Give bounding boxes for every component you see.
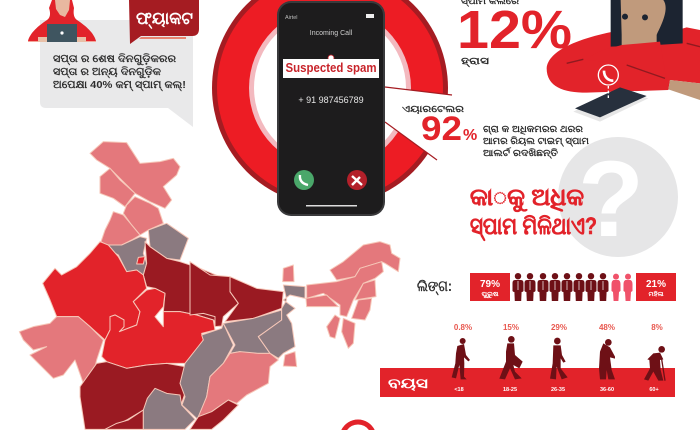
female share box: ମହିଳା — [648, 291, 665, 298]
age percentages: 0.8% — [454, 323, 472, 332]
age percentages: 15% — [503, 323, 519, 332]
age range labels: 60+ — [649, 387, 659, 393]
gender breakdown: ଲିଙ୍ଗ: — [417, 278, 452, 296]
stat: 12 percent reduction: 12% — [457, 0, 572, 60]
illustration: hooded person with laptop — [28, 0, 96, 42]
map: eastern and north-eastern states — [180, 242, 400, 429]
female share box — [636, 273, 676, 301]
smartphone — [277, 1, 385, 216]
heading: who gets more spam — [470, 184, 597, 242]
age range labels: 18-25 — [503, 387, 517, 393]
heading: who gets more spam: ସ୍ପାମ ମିଳିଥାଏ? — [470, 213, 597, 242]
age breakdown — [380, 323, 675, 397]
smartphone: Airtel — [285, 15, 298, 21]
walking figures — [452, 336, 665, 381]
suspected spam banner: Suspected spam — [286, 61, 376, 75]
stat: 92 percent: 92 — [421, 110, 462, 148]
stat: 92 percent — [402, 104, 590, 160]
female figures — [612, 274, 632, 301]
panel: fact speech bubble — [40, 20, 193, 127]
age breakdown: ବୟସ — [388, 375, 428, 392]
illustration: woman leaning over phone — [547, 0, 700, 122]
icon: question mark circle — [558, 137, 678, 259]
age range labels — [454, 387, 659, 393]
stat: 92 percent: ଏୟାରଟେଲର — [402, 104, 465, 115]
stat description: ଗ୍ରା କ ଅଧିକମରର ଥରର — [483, 124, 584, 136]
panel: fact speech bubble: ଅପେକ୍ଷା 40% କମ୍ ସ୍ପାମ୍ କଲ୍! — [53, 79, 186, 92]
phone alert icon — [598, 65, 618, 100]
graphic: red ring behind phone — [212, 0, 455, 206]
india map — [19, 142, 400, 429]
decline button — [347, 170, 367, 190]
stat description — [483, 124, 590, 160]
gender breakdown — [417, 273, 676, 301]
age percentages: 8% — [651, 323, 663, 332]
map: north and west states — [19, 142, 220, 429]
fact tag — [129, 0, 199, 44]
icon: question mark circle: ? — [578, 138, 644, 259]
stat description: ଆମର ରିୟଲ ଟାଇମ୍ ସ୍ପାମ — [483, 135, 590, 148]
age range labels: 26-35 — [551, 387, 565, 393]
male share box: ପୁରୁଷ — [482, 291, 499, 298]
icon: red logo ring at bottom — [341, 419, 375, 430]
age percentages: 48% — [599, 323, 615, 332]
stat: 12 percent reduction: ହ୍ରାସ — [461, 56, 490, 68]
panel: fact speech bubble: ସପ୍ତା ର ଅନ୍ୟ ଦିନଗୁଡ଼ିକ — [53, 65, 161, 80]
female share box: 21% — [646, 279, 666, 290]
heading: who gets more spam: କା◌କୁ ଅଧିକ — [470, 184, 584, 212]
phone number: + 91 987456789 — [298, 95, 364, 105]
smartphone: Incoming Call — [310, 30, 353, 37]
panel: fact speech bubble: ସପ୍ତା ର ଶେଷ ଦିନଗୁଡ଼ିକରର — [53, 52, 177, 67]
answer button — [294, 170, 314, 190]
stat: 92 percent: % — [463, 127, 477, 144]
suspected spam banner — [283, 55, 379, 78]
stat description: ଆଲର୍ଟ ରଦଖିଛନ୍ତି — [483, 145, 558, 160]
age percentages: 29% — [551, 323, 567, 332]
age percentages — [454, 323, 663, 332]
fact tag: ଫ୍ୟାକଟ — [136, 9, 193, 30]
male figures — [512, 273, 608, 301]
age range labels: 36-60 — [600, 387, 614, 393]
male share box — [470, 273, 510, 301]
map: southern states — [105, 388, 195, 429]
age range labels: <18 — [454, 387, 464, 393]
male share box: 79% — [480, 279, 500, 290]
